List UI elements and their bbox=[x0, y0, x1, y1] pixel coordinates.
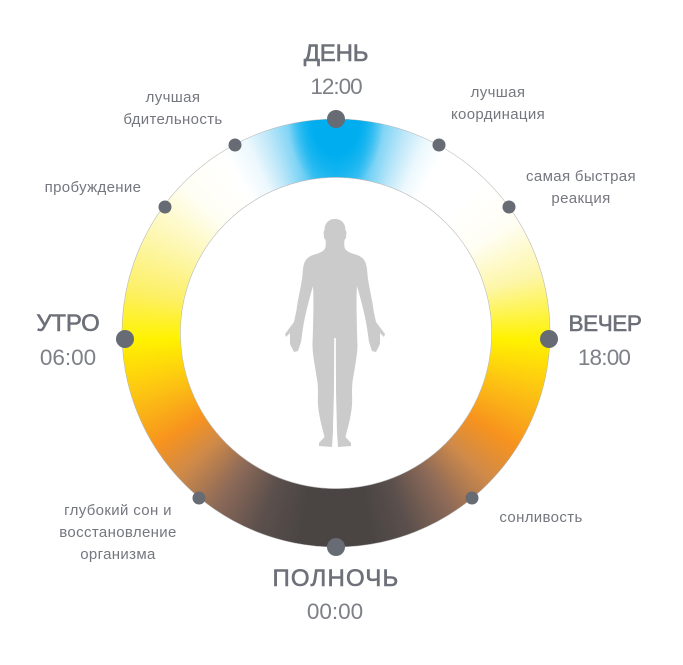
label: best coordination: лучшая bbox=[471, 84, 525, 101]
label: deep sleep: организма bbox=[80, 546, 156, 563]
time: 06:00: 06:00 bbox=[40, 345, 96, 370]
heading: noon: ДЕНЬ bbox=[304, 40, 368, 67]
gradient ring bbox=[122, 119, 550, 547]
label: awakening: пробуждение bbox=[45, 179, 141, 196]
heading: morning: УТРО bbox=[36, 310, 100, 337]
label: deep sleep: глубокий сон и bbox=[64, 502, 172, 519]
label: deep sleep: восстановление bbox=[59, 524, 177, 541]
label: best alertness: бдительность bbox=[123, 111, 223, 128]
heading: evening: ВЕЧЕР bbox=[568, 311, 642, 336]
time: 00:00: 00:00 bbox=[307, 599, 363, 624]
time markers bbox=[116, 110, 558, 556]
time: 18:00: 18:00 bbox=[578, 345, 630, 370]
heading: midnight: ПОЛНОЧЬ bbox=[272, 565, 400, 592]
label: fastest reaction bbox=[526, 168, 636, 207]
label: fastest reaction: самая быстрая bbox=[526, 168, 636, 185]
human silhouette bbox=[285, 219, 385, 447]
label: best alertness bbox=[123, 89, 223, 128]
label: deep sleep bbox=[59, 502, 177, 563]
ring outline bbox=[122, 119, 550, 547]
label: drowsiness: сонливость bbox=[499, 509, 583, 526]
label: fastest reaction: реакция bbox=[551, 190, 611, 207]
label: best coordination: координация bbox=[451, 106, 545, 123]
time: 12:00: 12:00 bbox=[310, 74, 362, 99]
label: best coordination bbox=[451, 84, 545, 123]
label: best alertness: лучшая bbox=[146, 89, 200, 106]
